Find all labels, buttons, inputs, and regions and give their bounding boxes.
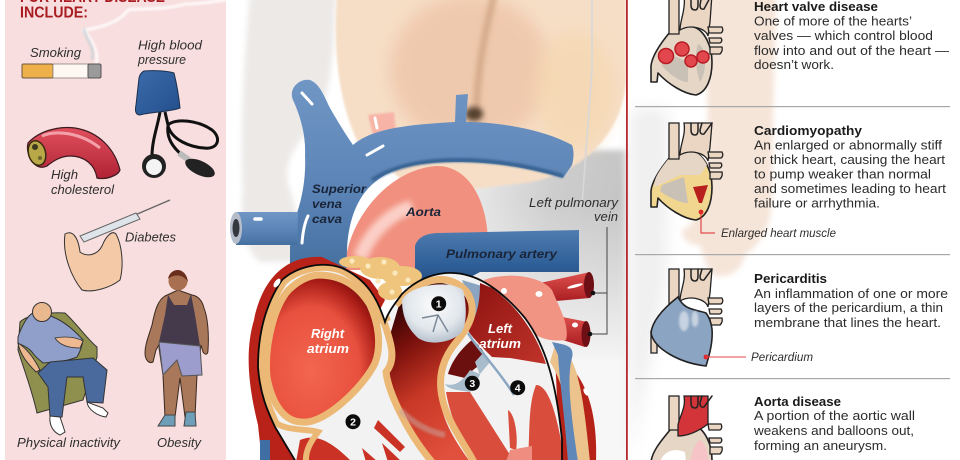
number marker 2 bbox=[346, 414, 360, 429]
heart outline bbox=[258, 265, 562, 460]
lower backdrop tone bbox=[470, 369, 627, 460]
left ventricle muscles bbox=[446, 385, 565, 460]
right ventricle red muscle bbox=[296, 420, 405, 460]
heart icon: aorta disease bbox=[651, 396, 722, 460]
divider rule 1 bbox=[635, 106, 950, 107]
heading: risk factors bbox=[20, 0, 165, 22]
text: pericarditis: layers of the pericardium, a thin bbox=[754, 301, 943, 315]
callout: pericardium: Pericardium bbox=[751, 352, 813, 364]
label: left atrium: atrium bbox=[479, 337, 521, 351]
label: superior vena cava: cava bbox=[312, 212, 342, 226]
icon: clogged artery bbox=[26, 128, 120, 179]
mitral dark area bbox=[448, 340, 487, 378]
aorta bbox=[345, 166, 488, 270]
icon: obese woman bbox=[145, 270, 208, 426]
text: aorta disease: Aorta disease bbox=[754, 395, 841, 409]
divider rule 3 bbox=[635, 378, 950, 379]
text: pericarditis bbox=[754, 272, 948, 330]
left atrium exterior bbox=[484, 276, 567, 341]
text: heart valve disease: flow into and out of the heart — bbox=[754, 44, 950, 58]
number marker 1: 1 bbox=[436, 298, 442, 310]
label: superior vena cava: Superior bbox=[312, 182, 367, 196]
vein side branch bbox=[236, 212, 298, 245]
number marker 2: 2 bbox=[350, 416, 356, 428]
callout: enlarged heart muscle bbox=[701, 212, 836, 240]
left arm silhouette bbox=[242, 0, 336, 262]
label: diabetes: Diabetes bbox=[125, 230, 176, 244]
text: cardiomyopathy: and sometimes leading to heart bbox=[754, 182, 947, 196]
panel: heart conditions bbox=[626, 0, 950, 460]
chest hair bbox=[465, 107, 483, 121]
highlights on heart bbox=[272, 277, 590, 396]
tan outer band bbox=[258, 265, 385, 427]
label: high cholesterol: cholesterol bbox=[51, 183, 115, 197]
shadow fade bbox=[470, 200, 630, 370]
icon: sitting man bbox=[18, 302, 108, 435]
panel: risk factors bbox=[5, 0, 240, 460]
label: aorta: Aorta bbox=[405, 205, 441, 219]
exterior heart right side bbox=[550, 342, 596, 460]
exterior heart left side bbox=[249, 257, 385, 460]
chamber septum shadow bbox=[400, 410, 445, 435]
text: heart valve disease: One of more of the hearts’ bbox=[754, 14, 912, 28]
heart icon: cardiomyopathy bbox=[651, 123, 723, 220]
heading: risk factors: INCLUDE: bbox=[20, 4, 88, 22]
text: aorta disease: weakens and balloons out, bbox=[753, 424, 914, 438]
label: left atrium: Left bbox=[488, 322, 513, 336]
label: left pulmonary vein: Left pulmonary bbox=[529, 196, 619, 210]
mitral valve bbox=[445, 352, 490, 392]
number marker 4 bbox=[510, 380, 525, 395]
red divider line bbox=[626, 0, 628, 460]
callout: pericardium bbox=[706, 352, 813, 364]
shadow below chest bbox=[470, 150, 626, 360]
label: right atrium bbox=[307, 327, 349, 356]
vein opening bbox=[230, 212, 242, 244]
right atrium chamber with wall bbox=[267, 275, 379, 422]
label: high blood pressure: High blood bbox=[138, 38, 203, 52]
callout lines: left pulmonary vein bbox=[588, 227, 607, 336]
heart icon: pericarditis bbox=[651, 269, 723, 366]
panel: body backdrop with chest and arms bbox=[242, 0, 630, 460]
text: heart valve disease bbox=[754, 0, 950, 72]
text: aorta disease: A portion of the aortic wall bbox=[754, 409, 915, 423]
text: cardiomyopathy: to pump weaker than normal bbox=[754, 168, 931, 182]
label: right atrium: atrium bbox=[307, 342, 349, 356]
heart icon: valve disease bbox=[651, 0, 723, 95]
label: superior vena cava: vena bbox=[312, 197, 342, 211]
text: heart valve disease: Heart valve disease bbox=[754, 0, 878, 14]
callout: enlarged heart muscle: Enlarged heart muscle bbox=[721, 228, 836, 240]
label: superior vena cava bbox=[312, 182, 367, 226]
pulmonary veins bbox=[540, 272, 594, 347]
label: left pulmonary vein: vein bbox=[594, 210, 618, 224]
text: cardiomyopathy: or thick heart, causing the heart bbox=[754, 153, 946, 167]
text: pericarditis: Pericarditis bbox=[754, 272, 827, 286]
label: physical inactivity: Physical inactivity bbox=[17, 436, 121, 450]
icon: cigarette bbox=[22, 64, 101, 78]
smoke wisp bbox=[84, 0, 240, 64]
pulmonary artery bbox=[415, 230, 579, 288]
text: cardiomyopathy bbox=[754, 124, 947, 210]
text: cardiomyopathy: Cardiomyopathy bbox=[754, 124, 862, 138]
lower left tan wall bbox=[272, 420, 318, 460]
aortic valve bbox=[402, 284, 466, 343]
label: left pulmonary vein bbox=[529, 196, 619, 224]
panel background bbox=[5, 0, 226, 460]
label: left atrium bbox=[479, 322, 521, 351]
number marker 4: 4 bbox=[515, 382, 521, 394]
icon: hand with syringe bbox=[64, 200, 170, 291]
chest tint right bbox=[535, 30, 615, 150]
arm edge line bbox=[582, 0, 592, 205]
label: high cholesterol bbox=[51, 168, 115, 197]
arch underside shade bbox=[372, 160, 563, 180]
label: right atrium: Right bbox=[311, 327, 345, 341]
pulmonary tissue between walls bbox=[462, 280, 480, 318]
inferior blue vessel bbox=[260, 440, 270, 460]
label: pulmonary artery: Pulmonary artery bbox=[446, 247, 558, 261]
icon: blood pressure cuff bbox=[135, 71, 218, 181]
label: high blood pressure bbox=[137, 38, 203, 67]
superior vena cava and arch bbox=[290, 80, 574, 272]
text: aorta disease bbox=[753, 395, 915, 453]
interior white base bbox=[270, 270, 562, 460]
chest cleft bbox=[476, 0, 494, 115]
label: high blood pressure: pressure bbox=[137, 53, 186, 67]
aorta light arc bbox=[360, 207, 412, 258]
text: aorta disease: forming an aneurysm. bbox=[754, 439, 887, 453]
label: high cholesterol: High bbox=[51, 168, 78, 182]
heart anatomy illustration bbox=[230, 80, 619, 460]
number marker 3 bbox=[465, 376, 480, 391]
chest tint bbox=[390, 0, 550, 145]
vein highlights bbox=[255, 93, 383, 243]
fat deposits bbox=[339, 256, 422, 300]
label: smoking: Smoking bbox=[30, 46, 81, 60]
text: heart valve disease: doesn’t work. bbox=[754, 58, 834, 72]
mitral chord line bbox=[468, 333, 514, 395]
heart interior, clipped to outline bbox=[250, 260, 570, 460]
left atrium cutaway bbox=[468, 283, 546, 364]
vein opening inner bbox=[232, 219, 240, 237]
right arm and hand silhouette bbox=[682, 0, 776, 276]
text: cardiomyopathy: failure or arrhythmia. bbox=[754, 196, 880, 210]
number marker 1 bbox=[431, 296, 446, 311]
text: cardiomyopathy: An enlarged or abnormally stiff bbox=[754, 138, 943, 152]
central chamber bbox=[389, 282, 470, 460]
smoke wisp shadow bbox=[84, 28, 93, 60]
valve leaflet folds bbox=[422, 315, 448, 332]
text: pericarditis: membrane that lines the heart. bbox=[754, 316, 941, 330]
divider rule 2 bbox=[635, 254, 950, 255]
aorta upper pink segment bbox=[368, 112, 398, 155]
label: obesity: Obesity bbox=[157, 436, 202, 450]
text: pericarditis: An inflammation of one or more bbox=[754, 287, 948, 301]
chest bbox=[336, 0, 626, 195]
grey wrist shadow bbox=[630, 108, 668, 460]
septum wall bbox=[384, 280, 474, 460]
number marker 3: 3 bbox=[469, 378, 475, 390]
text: heart valve disease: valves — which control blood bbox=[754, 29, 933, 43]
